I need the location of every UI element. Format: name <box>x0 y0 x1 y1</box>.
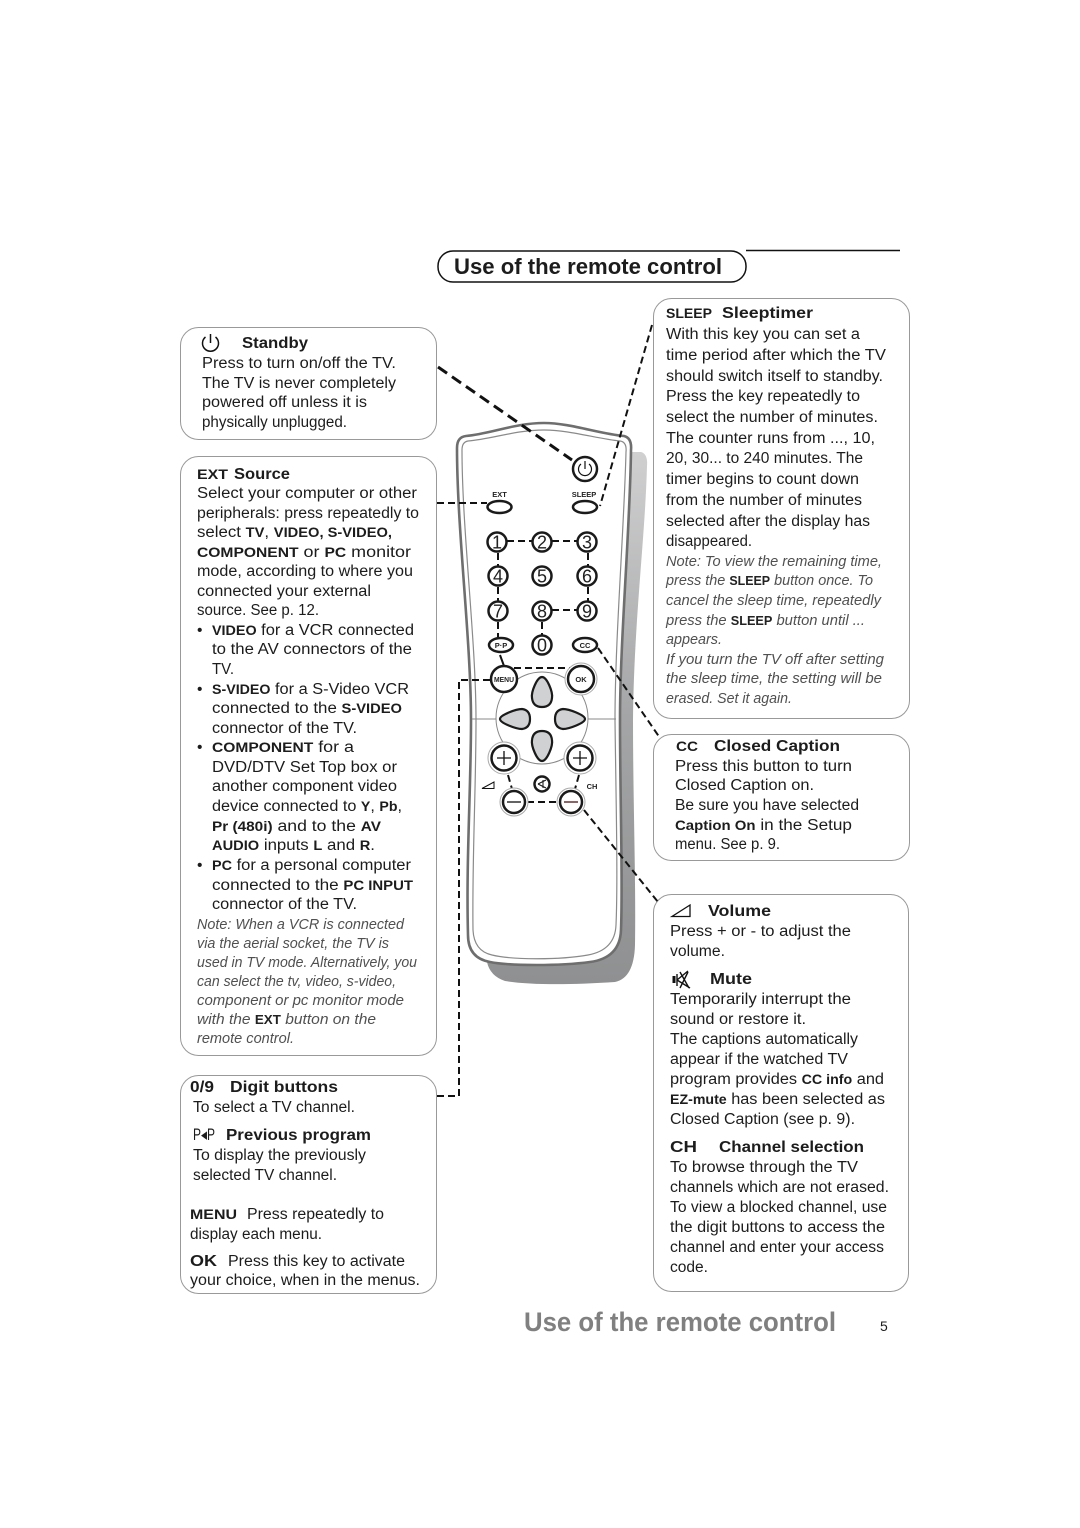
button: SLEEP <box>572 490 597 513</box>
panel: source: S-VIDEO for a S-Video VCR <box>212 681 409 698</box>
panel: source: Select your computer or other <box>197 485 417 502</box>
panel: source: connected to the S-VIDEO <box>212 700 402 717</box>
panel: sleeptimer: should switch itself to standby. <box>666 368 883 385</box>
panel: sleeptimer: from the number of minutes <box>666 492 862 509</box>
panel: closed caption: Closed Caption on. <box>675 777 814 794</box>
button: mute <box>534 776 550 792</box>
panel: source: peripherals: press repeatedly to <box>197 505 419 522</box>
button: EXT <box>488 490 512 513</box>
note: sleep: cancel the sleep time, repeatedly <box>666 593 882 609</box>
panel: sleeptimer: disappeared. <box>666 533 752 550</box>
remote control illustration <box>437 325 660 1096</box>
panel: digit buttons and menu: your choice, when in the menus. <box>190 1272 420 1289</box>
panel: volume, mute, channel: To view a blocked channel, use <box>670 1199 887 1216</box>
panel: volume, mute, channel: the digit buttons to access the <box>670 1219 885 1236</box>
note: sleep: press the SLEEP button once. To <box>665 573 873 589</box>
button: SLEEP: SLEEP <box>572 490 596 499</box>
note: sleep: appears. <box>666 632 722 648</box>
note: VCR: component or pc monitor mode <box>197 993 404 1009</box>
panel: digit buttons and menu: P◂P <box>193 1125 215 1144</box>
panel: source: • <box>197 681 202 698</box>
panel: sleeptimer: time period after which the TV <box>666 347 887 364</box>
panel: volume, mute, channel: volume. <box>670 943 725 960</box>
digit keys: 0 <box>537 636 547 656</box>
panel: source: another component video <box>212 778 397 795</box>
panel: source: to the AV connectors of the <box>212 641 412 658</box>
panel: sleeptimer: The counter runs from ..., 10, <box>666 430 875 447</box>
divider line and d-pad ring <box>472 718 616 720</box>
panel: volume, mute, channel: Channel selection <box>719 1139 864 1156</box>
panel: digit buttons and menu: selected TV channel. <box>193 1167 337 1184</box>
page number: 5 <box>880 1318 888 1334</box>
panel: sleeptimer: With this key you can set a <box>666 326 860 343</box>
button: MENU <box>491 666 517 692</box>
note: VCR: via the aerial socket, the TV is <box>197 936 389 952</box>
icon: volume wedge <box>672 905 690 916</box>
panel: source: • <box>197 857 202 874</box>
panel: source: DVD/DTV Set Top box or <box>212 759 397 776</box>
panel: volume, mute, channel: Closed Caption (see p. 9). <box>670 1111 855 1128</box>
button: OK <box>565 663 597 695</box>
panel: source: COMPONENT or PC monitor <box>197 544 411 561</box>
panel: volume, mute, channel: Volume <box>708 903 771 920</box>
button: volume plus <box>488 742 520 774</box>
panel: source: connected to the PC INPUT <box>212 877 414 894</box>
panel: volume, mute, channel: To browse through the TV <box>670 1159 859 1176</box>
button: volume minus <box>500 788 528 816</box>
icon: power <box>203 334 218 351</box>
panel: source: • <box>197 739 202 756</box>
panel: sleeptimer: 20, 30... to 240 minutes. The <box>666 450 863 467</box>
panel: digit buttons and menu: Digit buttons <box>230 1079 338 1096</box>
panel: volume, mute, channel: Mute <box>710 971 752 988</box>
panel: volume, mute, channel <box>654 894 908 1292</box>
panel: volume, mute, channel: code. <box>670 1259 708 1276</box>
button: power <box>573 457 597 481</box>
panel: source: EXT <box>197 467 229 482</box>
panel: closed caption: menu. See p. 9. <box>675 836 780 853</box>
note: VCR: with the EXT button on the <box>197 1012 376 1028</box>
note: VCR: remote control. <box>197 1031 294 1047</box>
panel: closed caption: Press this button to turn <box>675 758 852 775</box>
panel: digit buttons and menu: Press repeatedly to <box>247 1206 384 1223</box>
digit keys: 6 <box>582 566 592 586</box>
digit keys: 2 <box>537 532 547 552</box>
remote shadow <box>487 452 647 984</box>
panel: volume, mute, channel: EZ-mute has been selected as <box>670 1091 885 1108</box>
panel: volume, mute, channel: channel and enter your access <box>670 1239 884 1256</box>
panel: digit buttons and menu: 0/9 <box>190 1079 214 1096</box>
button: CC <box>573 638 597 652</box>
panel: sleeptimer: SLEEP <box>666 306 712 321</box>
title banner <box>438 250 900 282</box>
note: VCR <box>197 917 417 1047</box>
leader lines <box>437 325 660 1096</box>
digit keys: 3 <box>582 532 592 552</box>
panel: source: Pr (480i) and to the AV <box>212 818 381 835</box>
note: sleep: If you turn the TV off after setting <box>666 652 884 668</box>
panel: sleeptimer: selected after the display has <box>666 513 870 530</box>
panel: source: VIDEO for a VCR connected <box>212 622 414 639</box>
panel: sleeptimer: Press the key repeatedly to <box>666 388 860 405</box>
title banner: Use of the remote control <box>454 254 722 279</box>
panel: source: connector of the TV. <box>212 720 357 737</box>
panel: digit buttons and menu <box>180 1076 436 1294</box>
digit keys: 4 <box>493 566 503 586</box>
panel: standby: physically unplugged. <box>202 414 347 431</box>
panel: volume, mute, channel: CH <box>670 1139 697 1156</box>
panel: digit buttons and menu: Previous program <box>226 1127 371 1144</box>
button: channel plus <box>564 742 596 774</box>
digit keys: 7 <box>493 602 503 622</box>
panel: volume, mute, channel: Press + or - to adjust the <box>670 923 851 940</box>
panel: source: select TV, VIDEO, S-VIDEO, <box>197 524 392 541</box>
panel: standby: Press to turn on/off the TV. <box>202 355 396 372</box>
icon: volume label <box>482 782 494 788</box>
panel: source: source. See p. 12. <box>197 602 319 619</box>
remote body <box>457 423 631 965</box>
button: MENU: MENU <box>494 675 514 684</box>
panel: source: connected your external <box>197 583 371 600</box>
cursor keys <box>500 677 585 761</box>
panel: source: device connected to Y, Pb, <box>212 798 402 815</box>
panel: volume, mute, channel: program provides CC info and <box>670 1071 884 1088</box>
panel: closed caption: Caption On in the Setup <box>675 817 852 834</box>
button: channel minus <box>557 788 585 816</box>
note: VCR: Note: When a VCR is connected <box>197 917 405 933</box>
panel: volume, mute, channel: Temporarily interrupt the <box>670 991 851 1008</box>
panel: closed caption: Be sure you have selected <box>675 797 859 814</box>
digit keys: 8 <box>537 602 547 622</box>
panel: standby <box>180 328 436 440</box>
panel: standby: The TV is never completely <box>202 375 396 392</box>
panel: source: mode, according to where you <box>197 563 413 580</box>
panel: standby: Standby <box>242 335 308 352</box>
label: CH: CH <box>587 782 597 791</box>
panel: closed caption: CC <box>676 739 698 754</box>
icon: mute <box>672 971 690 988</box>
panel: sleeptimer: Sleeptimer <box>722 305 813 322</box>
panel: volume, mute, channel: appear if the watched TV <box>670 1051 849 1068</box>
button: EXT: EXT <box>492 490 507 499</box>
panel: digit buttons and menu: MENU <box>190 1207 237 1222</box>
button: P-P <box>489 638 513 652</box>
panel: source: • <box>197 622 202 639</box>
digit keys: 5 <box>537 566 547 586</box>
panel: volume, mute, channel: channels which are not erased. <box>670 1179 889 1196</box>
note: sleep: erased. Set it again. <box>666 691 792 707</box>
button: CC: CC <box>580 641 591 650</box>
note: sleep: Note: To view the remaining time, <box>666 554 882 570</box>
digit keys: 1 <box>492 532 502 552</box>
panel: sleeptimer: select the number of minutes. <box>666 409 878 426</box>
button: P-P: P·P <box>495 641 507 650</box>
panel: source: PC for a personal computer <box>212 857 411 874</box>
digit keys <box>488 532 596 656</box>
button: OK: OK <box>575 675 587 684</box>
panel: closed caption: Closed Caption <box>714 738 840 755</box>
panel: source <box>180 456 436 1056</box>
footer title: Use of the remote control <box>524 1307 836 1337</box>
panel: source: TV. <box>212 661 234 678</box>
note: sleep: the sleep time, the setting will be <box>666 671 882 687</box>
panel: digit buttons and menu: Press this key to activate <box>228 1253 405 1270</box>
panel: source: Source <box>234 466 290 483</box>
panel: sleeptimer <box>654 298 910 718</box>
panel: source: connector of the TV. <box>212 896 357 913</box>
note: sleep: press the SLEEP button until ... <box>665 613 865 629</box>
panel: standby: powered off unless it is <box>202 394 367 411</box>
panel: source: COMPONENT for a <box>212 739 354 756</box>
note: VCR: used in TV mode. Alternatively, you <box>197 955 417 971</box>
panel: digit buttons and menu: display each menu. <box>190 1226 322 1243</box>
panel: digit buttons and menu: To display the previously <box>193 1147 366 1164</box>
panel: volume, mute, channel: The captions automatically <box>670 1031 858 1048</box>
digit keys: 9 <box>582 602 592 622</box>
panel: source: AUDIO inputs L and R. <box>212 837 375 854</box>
note: VCR: can select the tv, video, s-video, <box>197 974 396 990</box>
panel: volume, mute, channel: sound or restore it. <box>670 1011 806 1028</box>
panel: sleeptimer: timer begins to count down <box>666 471 859 488</box>
panel: closed caption <box>654 734 910 860</box>
panel: digit buttons and menu: OK <box>190 1253 218 1270</box>
panel: digit buttons and menu: To select a TV channel. <box>193 1099 355 1116</box>
note: sleep <box>665 554 884 707</box>
